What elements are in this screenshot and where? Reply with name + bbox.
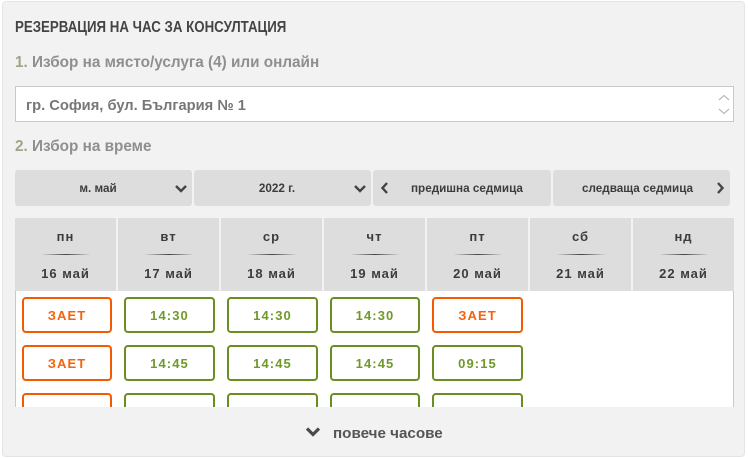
more hours label: повече часове <box>333 425 443 442</box>
previous week button <box>373 170 551 206</box>
heading: step 2: 2. Избор на време <box>15 138 152 155</box>
slot: 14:30 Thursday: 14:30 <box>356 308 394 323</box>
location select <box>15 86 734 122</box>
day header: Sunday: нд <box>674 229 693 244</box>
day header: Thursday <box>324 218 425 291</box>
icon: chevron down <box>306 427 320 437</box>
slot: 14:45 Wednesday <box>227 345 318 381</box>
slot: 14:30 Wednesday: 14:30 <box>253 308 292 323</box>
slot: 14:45 Tuesday <box>124 345 215 381</box>
slot: 14:45 Thursday: 14:45 <box>356 356 394 371</box>
day header: Friday <box>427 218 528 291</box>
selected location: гр. София, бул. България № 1 <box>26 98 246 114</box>
slot: 14:30 Wednesday <box>227 297 318 333</box>
day header: Thursday: 19 май <box>350 266 399 281</box>
day header: Sunday <box>633 218 734 291</box>
icon: chevron down <box>175 185 187 193</box>
more hours link <box>306 425 443 442</box>
slot: 14:30 Tuesday <box>124 297 215 333</box>
time slots <box>22 297 523 407</box>
previous week button: предишна седмица <box>411 182 523 195</box>
slot: Wednesday row 3 <box>227 393 318 429</box>
title: РЕЗЕРВАЦИЯ НА ЧАС ЗА КОНСУЛТАЦИЯ <box>15 19 286 36</box>
year select <box>194 170 371 206</box>
slot: busy Monday row 1: ЗАЕТ <box>48 308 86 323</box>
day header: Saturday: сб <box>572 229 589 244</box>
slot: Thursday row 3 <box>330 393 420 429</box>
day header: Friday: 20 май <box>453 266 502 281</box>
slot: 14:30 Thursday <box>330 297 420 333</box>
next week button: следваща седмица <box>582 182 693 195</box>
heading: step 1: 1. Избор на място/услуга (4) или онлайн <box>15 54 319 71</box>
year select: 2022 г. <box>259 182 295 195</box>
month select: м. май <box>79 182 117 195</box>
slot: 09:15 Friday <box>432 345 523 381</box>
day header: Monday: пн <box>57 229 74 244</box>
icon: chevron down <box>354 185 366 193</box>
icon: select spinner <box>718 95 730 114</box>
slot: 14:45 Tuesday: 14:45 <box>150 356 189 371</box>
icon: chevron left <box>381 182 388 194</box>
day header: Wednesday: 18 май <box>247 266 296 281</box>
slot: busy Friday row 1: ЗАЕТ <box>458 308 497 323</box>
day header: Tuesday: вт <box>160 229 177 244</box>
calendar body <box>15 291 734 407</box>
day header: Saturday <box>530 218 631 291</box>
slot: 14:45 Thursday <box>330 345 420 381</box>
slot: busy Monday row 3 <box>22 393 112 429</box>
slot: 14:30 Tuesday: 14:30 <box>150 308 189 323</box>
day header: Wednesday: ср <box>263 229 280 244</box>
slot: busy Monday row 2 <box>22 345 112 381</box>
day header: Thursday: чт <box>367 229 382 244</box>
day header: Monday: 16 май <box>41 266 90 281</box>
icon: chevron right <box>717 182 724 194</box>
day header: Sunday: 22 май <box>659 266 708 281</box>
slot: busy Monday row 2: ЗАЕТ <box>48 356 86 371</box>
slot: Friday row 3 <box>432 393 523 429</box>
next week button <box>553 170 730 206</box>
slot: Tuesday row 3 <box>124 393 215 429</box>
day header: Saturday: 21 май <box>556 266 605 281</box>
day header: Friday: пт <box>469 229 486 244</box>
slot: busy Monday row 1 <box>22 297 112 333</box>
day header: Wednesday <box>221 218 322 291</box>
day header: Monday <box>15 218 116 291</box>
day header: Tuesday <box>118 218 219 291</box>
day header: Tuesday: 17 май <box>144 266 193 281</box>
month select <box>15 170 192 206</box>
slot: 14:45 Wednesday: 14:45 <box>253 356 292 371</box>
slot: 09:15 Friday: 09:15 <box>458 356 497 371</box>
slot: busy Friday row 1 <box>432 297 523 333</box>
